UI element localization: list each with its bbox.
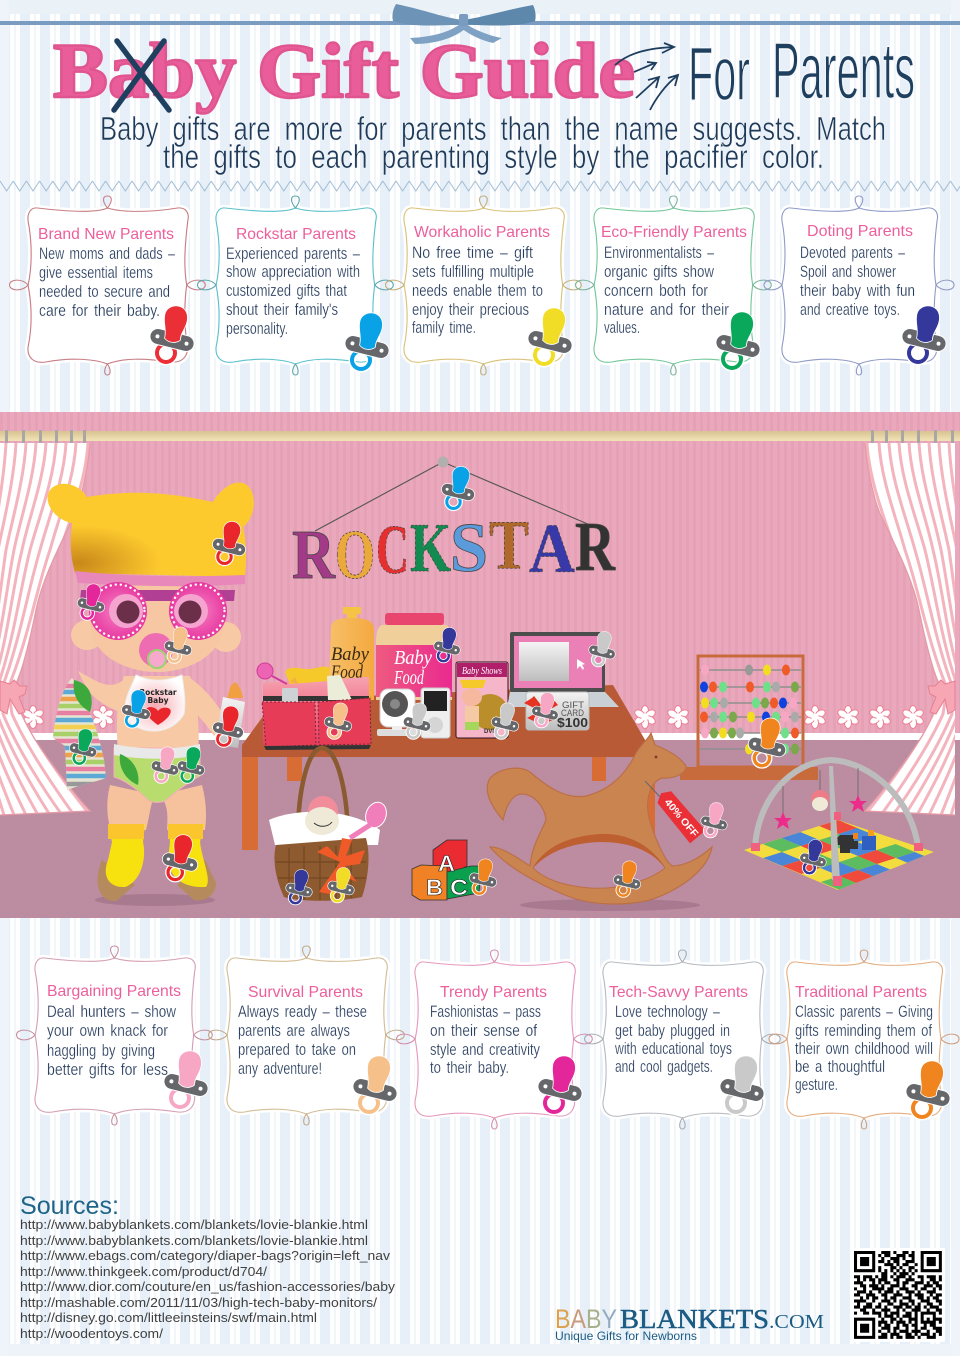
pacifier markers in scene xyxy=(69,467,827,903)
panel: Doting Parents: Spoil and shower xyxy=(800,262,896,281)
panel: Brand New Parents: needed to secure and xyxy=(39,282,170,301)
panel: Workaholic Parents: Workaholic Parents xyxy=(414,224,550,241)
baby bottle xyxy=(215,682,245,748)
panel: Rockstar Parents xyxy=(198,196,393,375)
panel: Tech-Savvy Parents: with educational toys xyxy=(614,1039,732,1058)
gift card: CARD xyxy=(561,708,584,718)
table xyxy=(242,685,655,850)
panel: Tech-Savvy Parents: Tech-Savvy Parents xyxy=(609,984,748,1001)
baby food pouch: Baby xyxy=(331,644,370,665)
diaper bag with items xyxy=(257,663,371,750)
panel: Bargaining Parents: Deal hunters – show xyxy=(47,1002,177,1021)
DVD baby shows: DVD xyxy=(484,729,497,735)
panel: Tech-Savvy Parents: and cool gadgets. xyxy=(615,1057,713,1076)
alphabet blocks: B xyxy=(426,875,443,900)
panel: Rockstar Parents: show appreciation with xyxy=(226,262,360,281)
ribbon with bow xyxy=(0,4,960,44)
panel: Workaholic Parents: sets fulfilling multiple xyxy=(412,262,534,281)
bib: Rockstar xyxy=(139,688,177,697)
shoes xyxy=(98,860,135,901)
play gym mat xyxy=(744,760,934,890)
arrows pointing to parents xyxy=(615,43,678,110)
icon: red pacifier xyxy=(149,306,195,362)
panel: Survival Parents: any adventure! xyxy=(238,1059,322,1078)
gym arches xyxy=(755,760,918,847)
panel: Brand New Parents: Brand New Parents xyxy=(38,226,174,243)
wall sign: ROCKSTAR: O xyxy=(335,517,375,594)
panel: Eco-Friendly Parents: Environmentalists – xyxy=(604,243,714,262)
price tag: 40% off xyxy=(645,781,705,843)
wall sign: ROCKSTAR: R xyxy=(292,517,336,594)
panel: Eco-Friendly Parents: organic gifts show xyxy=(604,262,715,281)
rocking horse xyxy=(487,733,712,911)
panel: Traditional Parents xyxy=(769,950,959,1129)
wall sign: ROCKSTAR: C xyxy=(376,512,409,589)
source links: http://mashable.com/2011/11/03/high-tech-baby-monitors/ xyxy=(20,1295,377,1310)
panel: Doting Parents: Devoted parents – xyxy=(800,243,905,262)
price tag: 40% off: 40% OFF xyxy=(662,797,700,840)
panel: Rockstar Parents: Experienced parents – xyxy=(226,244,360,263)
floor shadow xyxy=(95,894,215,906)
icon: pink pacifier xyxy=(163,1051,209,1107)
baby food jar: Food xyxy=(393,667,425,689)
panel: Eco-Friendly Parents: concern both for xyxy=(604,281,708,300)
source links: http://disney.go.com/littleeinsteins/swf/main.html xyxy=(20,1310,317,1325)
icon: gray pacifier xyxy=(719,1056,765,1112)
icon: blue pacifier xyxy=(344,313,390,369)
laptop xyxy=(507,632,619,707)
panel: Traditional Parents: gesture. xyxy=(795,1075,838,1094)
panel: Doting Parents: and creative toys. xyxy=(800,300,900,319)
baby character xyxy=(48,483,254,906)
bib: Baby xyxy=(147,696,169,705)
panel: Tech-Savvy Parents: Love technology – xyxy=(615,1002,720,1021)
DVD baby shows xyxy=(456,662,508,738)
panel: Eco-Friendly Parents: Eco-Friendly Parents xyxy=(601,224,747,241)
panel: Workaholic Parents: needs enable them to xyxy=(412,281,543,300)
socks xyxy=(106,824,145,887)
panel: Doting Parents: their baby with fun xyxy=(800,281,915,300)
panel: Rockstar Parents: customized gifts that xyxy=(226,281,347,300)
wall sign: ROCKSTAR: A xyxy=(529,511,575,588)
head xyxy=(90,576,224,672)
panel: Brand New Parents: New moms and dads – xyxy=(39,244,175,263)
source links: http://www.dior.com/couture/en_us/fashion-accessories/baby xyxy=(20,1279,396,1294)
panel: Survival Parents: parents are always xyxy=(238,1021,350,1040)
alphabet blocks: A xyxy=(438,851,455,876)
intro text xyxy=(100,110,886,175)
wall sign: ROCKSTAR: K xyxy=(410,510,451,587)
zigzag divider xyxy=(0,180,960,192)
leaf xyxy=(74,680,92,712)
logo: BabyBlankets.com: BLANKETS xyxy=(620,1304,769,1334)
panel: Bargaining Parents xyxy=(17,946,212,1125)
icon: magenta pacifier xyxy=(537,1056,583,1112)
panel: Trendy Parents: style and creativity xyxy=(430,1040,540,1059)
curtain rod xyxy=(0,430,960,443)
abacus xyxy=(680,656,818,780)
hat xyxy=(48,483,254,586)
panel: Workaholic Parents xyxy=(386,196,581,375)
panel: Trendy Parents xyxy=(397,950,592,1129)
sunglasses xyxy=(257,663,287,684)
panel: Workaholic Parents: No free time – gift xyxy=(412,243,533,262)
logo: BabyBlankets.com xyxy=(555,1304,824,1343)
source links: http://www.babyblankets.com/blankets/lovie-blankie.html xyxy=(20,1233,368,1248)
panel: Brand New Parents: care for their baby. xyxy=(39,301,160,320)
alphabet blocks xyxy=(412,840,481,900)
panel: Survival Parents: prepared to take on xyxy=(238,1040,356,1059)
scene: nursery room xyxy=(0,412,960,918)
mouth pacifier xyxy=(139,633,173,668)
gift card: $100 xyxy=(557,715,588,730)
panel: Tech-Savvy Parents: get baby plugged in xyxy=(615,1021,730,1040)
baby food pouch xyxy=(328,607,374,700)
panel: Doting Parents: Doting Parents xyxy=(807,223,913,240)
hanging stars and monkey xyxy=(774,768,867,829)
source links xyxy=(20,1217,396,1341)
source links: http://www.thinkgeek.com/product/d704/ xyxy=(20,1264,267,1279)
DVD baby shows: Baby Shows xyxy=(462,666,502,677)
panel: Bargaining Parents: your own knack for xyxy=(47,1021,168,1040)
panel: Eco-Friendly Parents: values. xyxy=(604,318,640,337)
panel: Rockstar Parents: Rockstar Parents xyxy=(236,226,356,243)
alphabet blocks: C xyxy=(450,875,468,900)
icon: green pacifier xyxy=(715,312,761,368)
panel: Trendy Parents: on their sense of xyxy=(430,1021,537,1040)
panel: Traditional Parents: be a thoughtful xyxy=(795,1057,885,1076)
baby food jar xyxy=(376,613,452,700)
icon: yellow pacifier xyxy=(527,308,573,364)
panel: Eco-Friendly Parents: nature and for their xyxy=(604,300,729,319)
wall sign: ROCKSTAR: R xyxy=(575,509,616,586)
logo: BabyBlankets.com: BABY xyxy=(555,1304,617,1334)
monkey toy xyxy=(305,796,339,835)
source links: http://www.babyblankets.com/blankets/lovie-blankie.html xyxy=(20,1217,368,1232)
panel: Survival Parents: Survival Parents xyxy=(248,984,363,1001)
leaf on diaper xyxy=(120,754,138,785)
title: For Parents: For xyxy=(688,32,750,117)
panel: Workaholic Parents: enjoy their precious xyxy=(412,300,529,319)
panel: Rockstar Parents: personality. xyxy=(226,319,288,338)
wall sign: ROCKSTAR xyxy=(292,456,616,594)
mat toys xyxy=(836,830,876,853)
panel: Workaholic Parents: family time. xyxy=(412,318,476,337)
right curtain xyxy=(865,443,960,815)
sources heading: Sources: xyxy=(20,1192,119,1220)
towel blanket xyxy=(53,678,106,790)
panel: Brand New Parents xyxy=(10,196,205,375)
floor xyxy=(0,740,960,918)
baby food pouch: Food xyxy=(330,662,363,683)
icon: orange pacifier xyxy=(905,1061,951,1117)
QR code xyxy=(851,1248,945,1342)
panel: Survival Parents xyxy=(209,946,404,1125)
torso xyxy=(117,676,199,752)
panel: Trendy Parents: to their baby. xyxy=(430,1058,509,1077)
panel: Rockstar Parents: shout their family's xyxy=(226,300,338,319)
title: For Parents xyxy=(688,26,915,117)
panel: Eco-Friendly Parents xyxy=(576,196,771,375)
left curtain xyxy=(0,443,90,815)
gift card xyxy=(524,692,589,730)
legs xyxy=(107,785,155,830)
baby monitor xyxy=(377,688,450,738)
logo: BabyBlankets.com: .COM xyxy=(769,1311,824,1333)
logo: BabyBlankets.com: Unique Gifts for Newborns xyxy=(555,1329,697,1343)
icon: peach pacifier xyxy=(352,1056,398,1112)
orange ribbon bow xyxy=(317,838,365,895)
panel: Trendy Parents: Fashionistas – pass xyxy=(430,1002,541,1021)
arms xyxy=(78,671,126,712)
title: Baby Gift Guide: Baby Gift Guide xyxy=(53,27,635,114)
panel: Trendy Parents: Trendy Parents xyxy=(440,984,547,1001)
source links: http://woodentoys.com/ xyxy=(20,1326,163,1341)
panel: Survival Parents: Always ready – these xyxy=(238,1002,367,1021)
panel: Bargaining Parents: better gifts for less. xyxy=(47,1060,172,1079)
icon: navy pacifier xyxy=(901,306,947,362)
panel: Bargaining Parents: Bargaining Parents xyxy=(47,983,181,1000)
bib xyxy=(125,675,185,731)
panel: Bargaining Parents: haggling by giving xyxy=(47,1041,155,1060)
panel: Brand New Parents: give essential items xyxy=(39,263,153,282)
pink rattle xyxy=(350,799,390,838)
source links: http://www.ebags.com/category/diaper-bags?origin=left_nav xyxy=(20,1248,391,1263)
gift basket xyxy=(269,748,390,901)
baby food jar: Baby xyxy=(394,647,432,669)
baseboard xyxy=(0,733,960,740)
glasses xyxy=(80,582,235,640)
wall flowers xyxy=(21,706,925,728)
sources block xyxy=(20,1192,396,1341)
gift card: GIFT xyxy=(562,700,585,710)
ears xyxy=(71,620,241,652)
wall sign: ROCKSTAR: S xyxy=(450,510,488,587)
panel: Traditional Parents: Traditional Parents xyxy=(795,984,927,1001)
wall xyxy=(0,412,960,734)
panel: Tech-Savvy Parents xyxy=(585,950,780,1129)
wall sign: ROCKSTAR: T xyxy=(489,507,529,584)
crossed-out letter mark xyxy=(114,41,169,110)
diaper xyxy=(114,744,200,802)
panel: Doting Parents xyxy=(764,196,954,375)
